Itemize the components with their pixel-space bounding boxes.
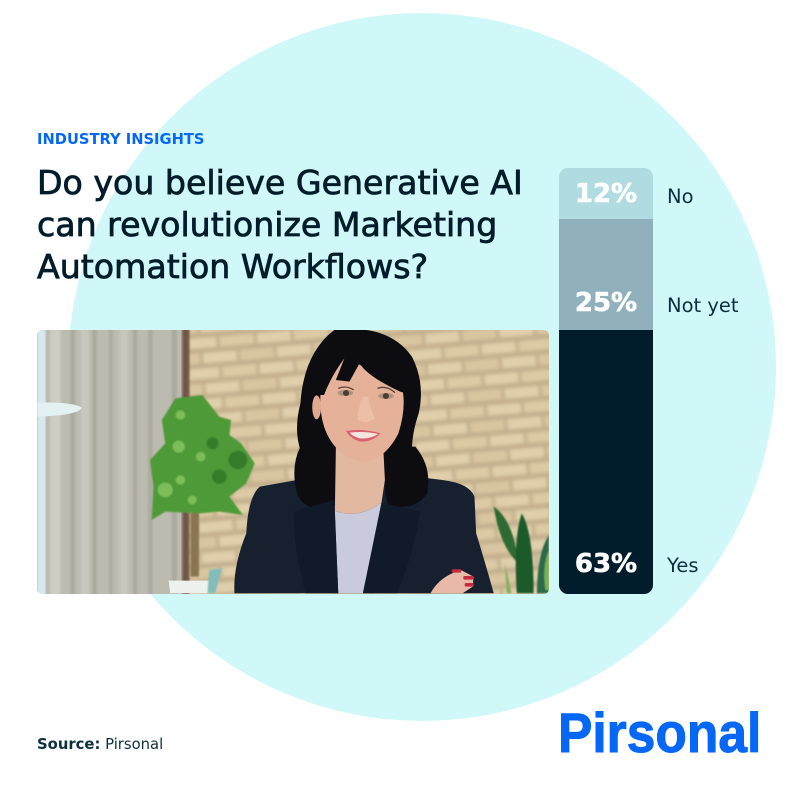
value: 25%: 25% <box>575 288 637 318</box>
value: 63%: 63% <box>575 549 637 579</box>
segment: no <box>559 168 653 219</box>
background circle <box>68 13 776 721</box>
bangs <box>320 356 403 395</box>
curtain <box>37 327 185 597</box>
face <box>320 357 404 462</box>
label: no: No <box>667 185 694 208</box>
wall <box>179 327 557 597</box>
label: not yet: Not yet <box>667 294 739 317</box>
hair curls <box>294 448 328 507</box>
title <box>36 163 523 286</box>
stacked bar chart <box>559 168 653 594</box>
snake plant <box>494 507 549 593</box>
lapels <box>306 500 338 594</box>
nose <box>358 397 375 422</box>
label: yes: Yes <box>667 554 698 577</box>
eyebrow: industry insights: INDUSTRY INSIGHTS <box>37 131 204 148</box>
mouth <box>346 430 381 441</box>
segment: yes <box>559 330 653 594</box>
plant <box>150 395 255 577</box>
arm and hand <box>431 570 473 593</box>
title: can revolutionize Marketing <box>37 205 497 244</box>
value: 12%: 12% <box>575 179 637 209</box>
eyes <box>338 390 353 396</box>
cup <box>169 581 209 593</box>
source: Source: Pirsonal <box>37 736 163 753</box>
photo: smiling businesswoman <box>37 330 549 594</box>
hair back <box>295 329 428 508</box>
segment: not yet <box>559 219 653 330</box>
lamp <box>37 327 46 597</box>
title: Do you believe Generative AI <box>37 163 523 202</box>
logo: Pirsonal: Pirsonal <box>558 701 761 764</box>
top <box>335 503 382 593</box>
title: Automation Workflows? <box>37 247 428 286</box>
neck <box>335 447 385 514</box>
jacket <box>234 477 494 593</box>
